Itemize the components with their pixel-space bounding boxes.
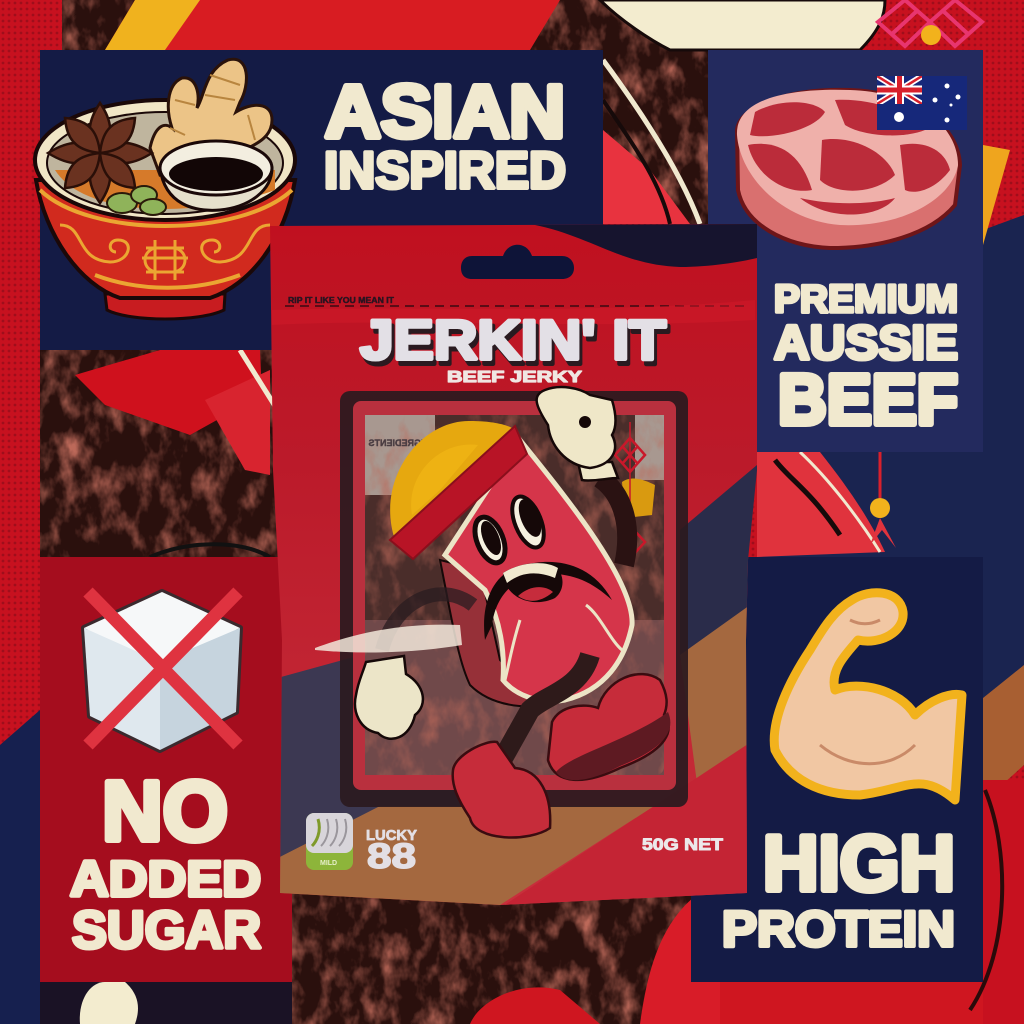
legs: [502, 655, 590, 760]
navy wave top right: [530, 224, 757, 267]
product pouch: [265, 220, 760, 910]
brown base: [270, 600, 757, 905]
open hand: [355, 656, 423, 739]
mouth: [503, 563, 562, 602]
badge: mild spice: [306, 813, 353, 870]
icon: raw steak: [737, 90, 960, 248]
product title: JERKIN' IT: [360, 308, 666, 371]
moustache: [484, 562, 612, 640]
net weight: 50G NET: [642, 835, 724, 854]
heading: protein: PROTEIN: [722, 901, 955, 957]
heading: sugar: SUGAR: [72, 901, 261, 960]
product title: JERKIN' IT: [363, 313, 669, 376]
icon: bowl with ginger, star anise and soy: [35, 59, 295, 319]
panel: premium aussie beef: [708, 50, 983, 452]
tear line: [285, 305, 750, 307]
icon: flexed arm: [774, 593, 962, 800]
navy diagonal band: [280, 658, 461, 858]
back arm: [382, 594, 473, 650]
lucky number: 88: [367, 837, 416, 876]
heading: inspired: INSPIRED: [324, 142, 566, 200]
hat: [390, 421, 512, 540]
right shoe: [548, 674, 669, 780]
panel: high protein: [691, 557, 983, 982]
panel: asian inspired: [35, 50, 603, 350]
mascot: [355, 387, 670, 837]
heading: high: HIGH: [763, 819, 955, 907]
tagline: RIP IT LIKE YOU MEAN IT: [288, 295, 395, 305]
heading: beef: BEEF: [778, 361, 958, 440]
heading: added: ADDED: [70, 851, 261, 907]
heading: aussie: AUSSIE: [774, 317, 958, 370]
heading: premium: PREMIUM: [774, 278, 958, 321]
gloss highlights: [315, 625, 462, 652]
heading: asian: ASIAN: [325, 70, 565, 153]
arm up: [600, 478, 627, 565]
mirrored label text: INGREDIENTS: [368, 438, 430, 448]
icon: australian flag: [877, 76, 967, 130]
decoration: chinese knot top right: [878, 0, 982, 46]
panel: no added sugar: [40, 557, 292, 982]
product subtitle: BEEF JERKY: [447, 369, 582, 386]
gold ingot and knots: [615, 422, 655, 556]
left shoe: [453, 742, 550, 837]
eyes: [472, 514, 508, 566]
heading: no: NO: [102, 764, 228, 858]
hang slot: [461, 245, 574, 279]
fist: [537, 387, 618, 481]
lucky label: LUCKY: [366, 827, 417, 844]
marbling: [505, 620, 520, 680]
window frame: [340, 391, 688, 807]
icon: crossed out sugar cube: [84, 592, 240, 750]
badge: mild spice: MILD: [320, 860, 337, 867]
decoration: tassel pendant: [870, 452, 896, 548]
